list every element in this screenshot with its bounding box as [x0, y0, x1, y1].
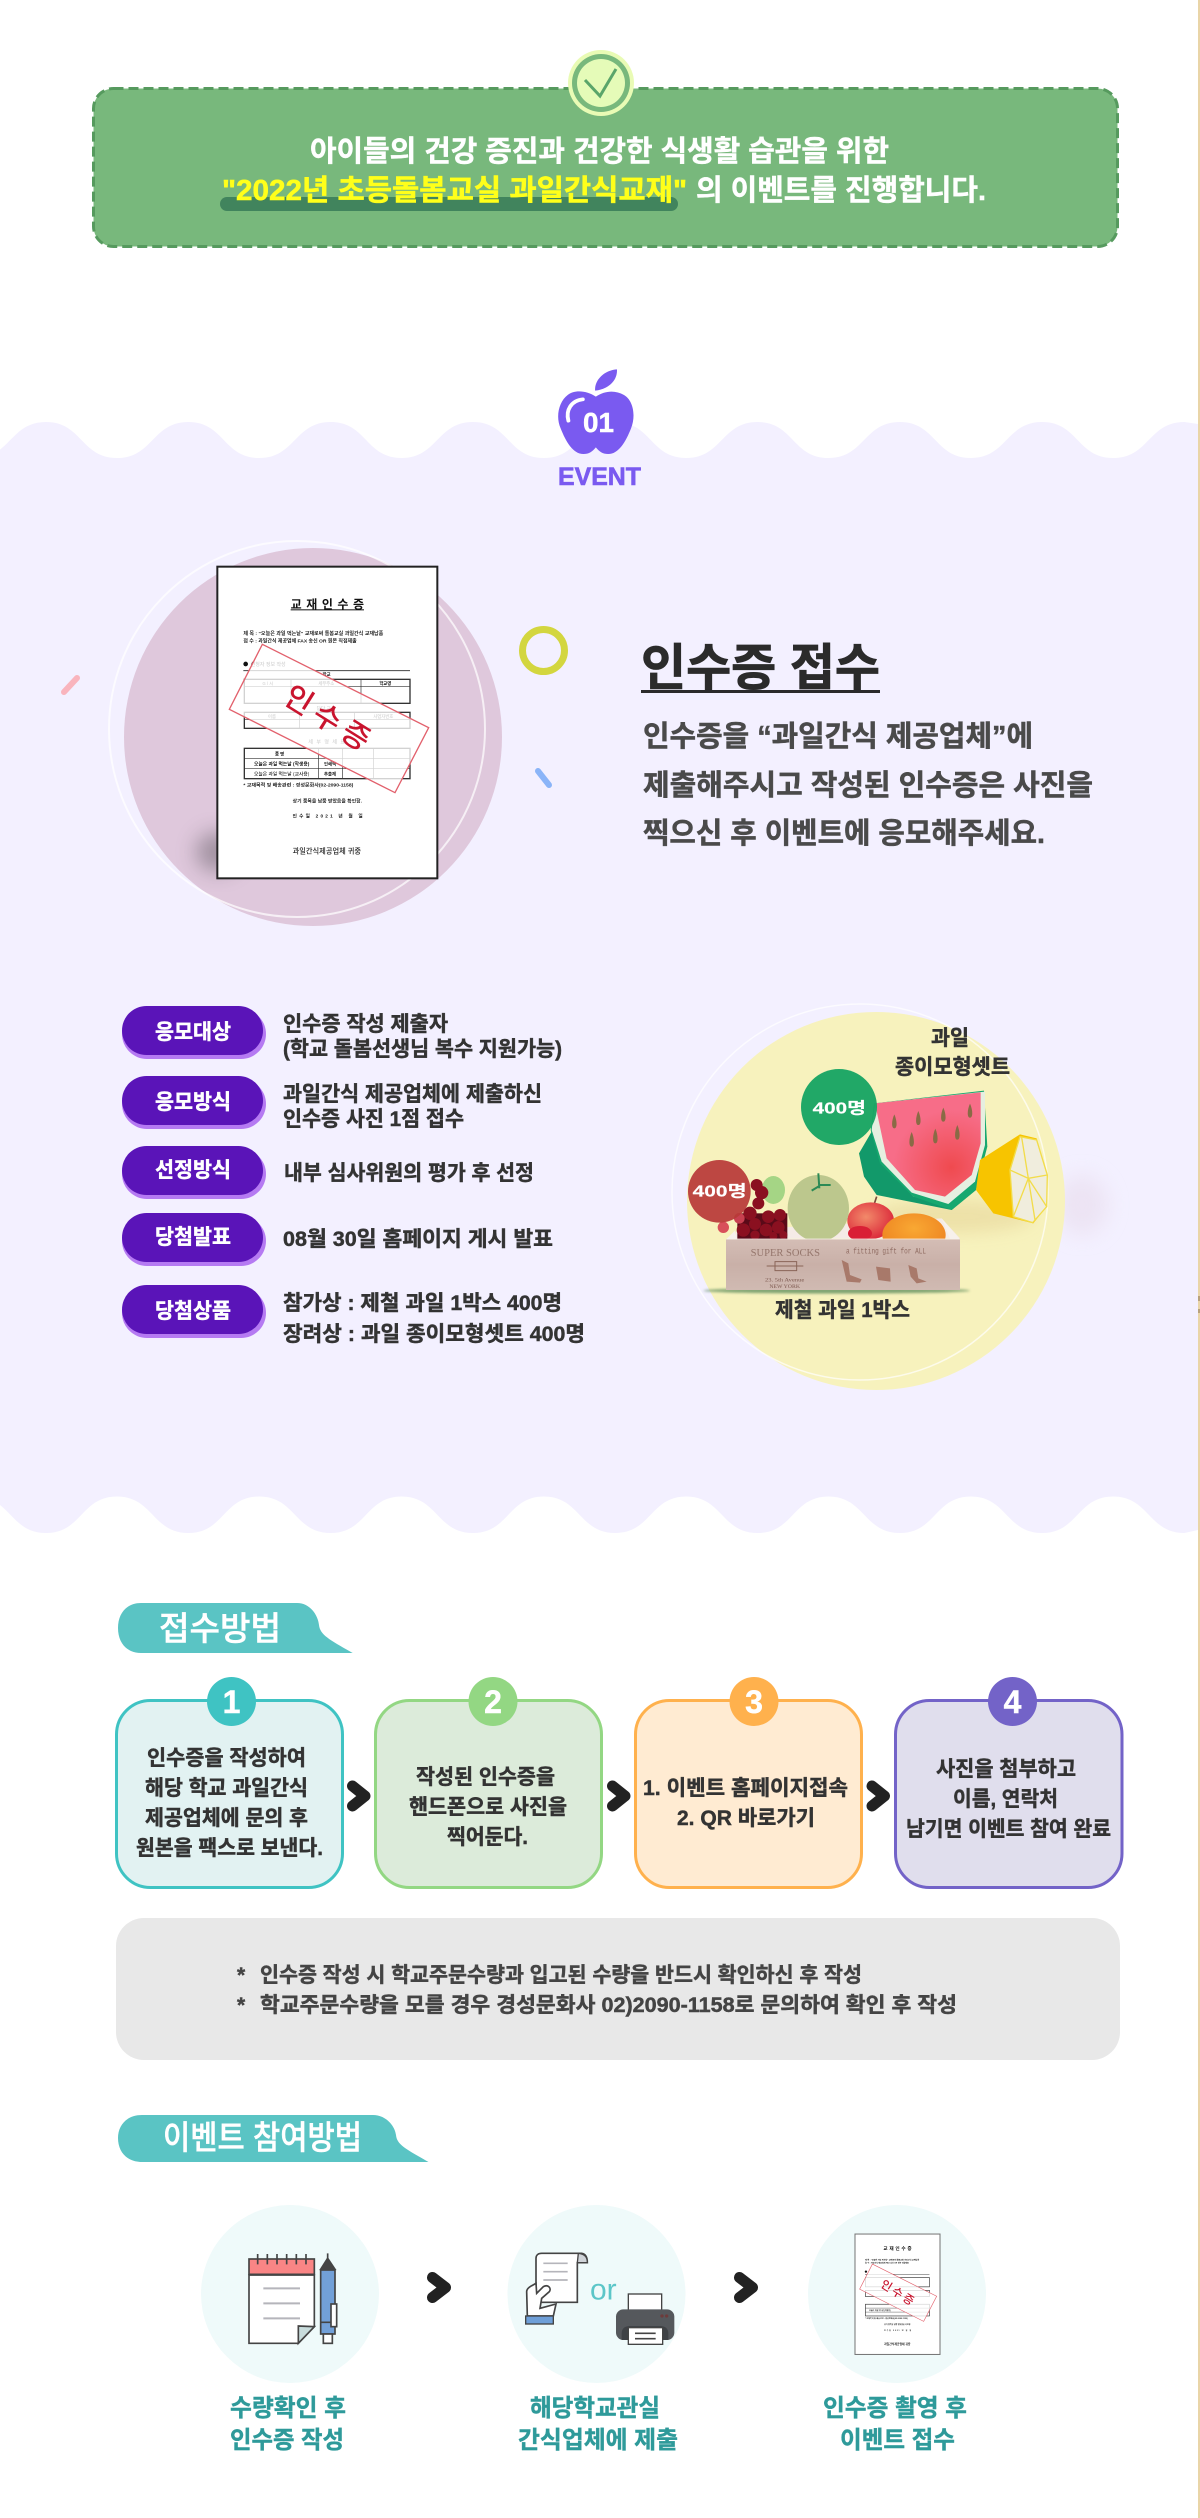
- caption: 간식업체에 제출: [518, 2427, 678, 2454]
- icon: small certificate: 상기 품목을 납품 받았음을 확인함.: [884, 2322, 911, 2326]
- row: prizes: 참가상 : 제철 과일 1박스 400명: [283, 1292, 562, 1315]
- row: prizes: 당첨상품: [155, 1300, 231, 1323]
- certificate document: 세 부 명 세 표: [308, 739, 345, 746]
- step: photo and enter: [808, 2205, 986, 2454]
- decorative pink dash: [64, 678, 77, 692]
- panel: notes: 인수증 작성 시 학교주문수량과 입고된 수량을 반드시 확인하신 후 작성: [260, 1964, 862, 1987]
- label: fruit box: 제철 과일 1박스: [775, 1299, 910, 1322]
- step card 1: 원본을 팩스로 보낸다.: [136, 1837, 323, 1860]
- label: paper fruit set: [895, 1027, 1010, 1079]
- certificate document: 신청자 정보 작성: [251, 661, 286, 668]
- step card 1: 해당 학교 과일간식: [145, 1777, 308, 1800]
- heading tab: how to participate: 이벤트 참여방법: [163, 2119, 362, 2156]
- text block: submission description: 제출해주시고 작성된 인수증은 사진을: [643, 769, 1093, 802]
- caption: 수량확인 후: [230, 2395, 346, 2422]
- row: applicants: 인수증 작성 제출자: [283, 1013, 448, 1036]
- icon: wooden crate: NEW YORK: [769, 1285, 801, 1290]
- icon: paper lemon: [976, 1134, 1047, 1223]
- highlight bar: [220, 197, 678, 211]
- banner text: 아이들의 건강 증진과 건강한 식생활 습관을 위한: [310, 135, 889, 168]
- icon: small certificate: 과일간식제공업체 귀중: [884, 2342, 911, 2346]
- decorative blue dash: [538, 771, 549, 785]
- icon: notepad and pen: [249, 2253, 337, 2343]
- heading tab: how to submit: [118, 1603, 353, 1653]
- banner text: 의 이벤트를 진행합니다.: [696, 174, 986, 207]
- row: prizes: 장려상 : 과일 종이모형셋트 400명: [283, 1323, 585, 1346]
- certificate document: 상기 품목을 납품 받았음을 확인함.: [293, 797, 362, 804]
- label: paper fruit set: 과일: [931, 1027, 969, 1050]
- row: applicants: [122, 1006, 562, 1061]
- row: method: 응모방식: [155, 1091, 231, 1114]
- icon: small certificate: 제 목 : "오늘은 과일 먹는날" 교재로써 돌봄교실 과일간식 교재납품: [865, 2257, 919, 2261]
- certificate document: 접 수 : 과일간식 제공업체 FAX 송신 OR 원본 직접제출: [243, 638, 357, 645]
- list: event details: [122, 1006, 585, 1346]
- icon: small certificate: * 교재목적 및 배송관련 : 경성문화사(02-2090-1158): [865, 2316, 908, 2320]
- icon: small certificate: 오늘은 과일 먹는날 (학생용): [869, 2308, 891, 2312]
- step card 1: 인수증을 작성하여: [147, 1747, 306, 1770]
- certificate document: 학교: [323, 671, 331, 678]
- caption: [230, 2395, 346, 2454]
- badge: 400 red: 400명: [693, 1183, 747, 1201]
- icon: apple stem and fruits: [718, 1173, 960, 1257]
- badge: number 1: 1: [223, 1684, 240, 1720]
- caption: 인수증 촬영 후: [823, 2395, 967, 2422]
- icon: apple 01 EVENT: 01: [583, 407, 614, 438]
- row: prizes: [122, 1285, 585, 1346]
- label: paper fruit set: 종이모형셋트: [895, 1056, 1010, 1079]
- step card 3: [636, 1677, 862, 1888]
- certificate document: 담당 교사: [317, 705, 336, 712]
- badge: 400 green: 400명: [813, 1099, 866, 1117]
- arrow 3: [872, 1786, 884, 1806]
- stamp: 인수증: [278, 680, 381, 761]
- step card 2: [376, 1677, 602, 1888]
- icon: small certificate: 인수일 2021 년 월 일: [884, 2328, 911, 2332]
- badge: number 4: [988, 1677, 1037, 1726]
- row: announcement: 당첨발표: [155, 1226, 231, 1249]
- badge: number 3: [730, 1677, 778, 1726]
- panel: prize illustration: [672, 1004, 1108, 1390]
- arrow 2: [612, 1786, 625, 1806]
- icon: paper or printer: [526, 2253, 674, 2344]
- panel: notes: [116, 1918, 1120, 2060]
- heading tab: how to submit: 접수방법: [159, 1610, 281, 1647]
- step card 1: 제공업체에 문의 후: [145, 1807, 308, 1830]
- icon: small certificate: 교 재 인 수 증: [883, 2245, 912, 2252]
- decorative ring: [522, 630, 564, 672]
- icon: wooden crate: 23. 5th Avenue: [765, 1279, 804, 1284]
- row: selection: 내부 심사위원의 평가 후 선정: [284, 1162, 534, 1185]
- certificate document: G / 시: [262, 681, 273, 686]
- icon: paper watermelon: [859, 1091, 987, 1210]
- badge: 400 green: [801, 1069, 877, 1145]
- certificate document: 오늘은 과일 먹는날 (교사용): [254, 770, 310, 777]
- step: write certificate: [201, 2205, 379, 2454]
- panel: notes: *: [237, 1964, 246, 1987]
- certificate document: 제 목 : "오늘은 과일 먹는날" 교재로써 돌봄교실 과일간식 교재납품: [243, 630, 384, 637]
- certificate document: 사업자번호: [373, 713, 393, 720]
- banner text: [222, 135, 986, 207]
- step card 4: 사진을 첨부하고: [936, 1758, 1076, 1781]
- badge: 400 red: [688, 1160, 751, 1223]
- row: selection: 선정방식: [155, 1159, 231, 1182]
- stamp: [229, 644, 429, 793]
- step card 2: 찍어둔다.: [447, 1826, 528, 1849]
- arrow: [740, 2278, 752, 2298]
- text block: submission description: [643, 720, 1093, 850]
- caption: [823, 2395, 967, 2454]
- certificate document: 과일간식제공업체 귀중: [293, 847, 361, 856]
- heading: certificate submission: 인수증 접수: [641, 640, 880, 696]
- certificate document: 학교명: [379, 680, 391, 687]
- caption: 이벤트 접수: [840, 2427, 955, 2454]
- icon: apple 01 EVENT: [558, 369, 641, 491]
- icon: check badge: [568, 50, 634, 116]
- step card 4: 남기면 이벤트 참여 완료: [906, 1818, 1111, 1841]
- row: selection: [122, 1146, 534, 1199]
- certificate document: 세부주소: [318, 680, 334, 687]
- certificate document: 교 재 인 수 증: [291, 596, 364, 611]
- badge: number 3: 3: [745, 1684, 763, 1720]
- certificate document: * 교재목적 및 배송관련 : 경성문화사(02-2090-1158): [243, 782, 354, 789]
- caption: 인수증 작성: [230, 2427, 344, 2454]
- caption: 해당학교관실: [530, 2395, 660, 2422]
- step card 2: 작성된 인수증을: [416, 1766, 555, 1789]
- panel: notes: *: [237, 1994, 246, 2017]
- icon: small certificate: 인수증: [878, 2278, 918, 2309]
- panel: lavender wave background: [0, 422, 1198, 1533]
- text block: submission description: 인수증을 “과일간식 제공업체”에: [643, 720, 1033, 753]
- certificate document: 인수일 2021 년 월 일: [293, 813, 363, 820]
- banner text: "2022년 초등돌봄교실 과일간식교재": [222, 174, 687, 207]
- caption: [518, 2395, 678, 2454]
- row: applicants: 응모대상: [155, 1021, 231, 1044]
- arrow: [432, 2278, 446, 2298]
- row: method: 과일간식 제공업체에 제출하신: [283, 1083, 542, 1106]
- arrow 1: [352, 1786, 365, 1806]
- step card 3: 2. QR 바로가기: [677, 1807, 815, 1830]
- certificate document: [217, 567, 437, 878]
- badge: number 2: [468, 1677, 518, 1726]
- badge: number 4: 4: [1004, 1684, 1022, 1720]
- icon: small certificate: [855, 2234, 940, 2354]
- step: submit to vendor: [508, 2205, 686, 2454]
- certificate document: 이름: [268, 713, 276, 720]
- right edge stripe: [1198, 0, 1200, 2518]
- step card 1: [116, 1677, 342, 1888]
- icon: paper or printer: or: [590, 2273, 617, 2306]
- icon: wooden crate: SUPER SOCKS: [751, 1248, 820, 1259]
- step card 4: 이름, 연락처: [953, 1788, 1058, 1811]
- step card 3: 1. 이벤트 홈페이지접속: [643, 1777, 848, 1800]
- panel: intro banner: [94, 50, 1118, 246]
- row: applicants: (학교 돌봄선생님 복수 지원가능): [283, 1038, 562, 1061]
- step card 2: 핸드폰으로 사진을: [409, 1796, 567, 1819]
- row: announcement: 08월 30일 홈페이지 게시 발표: [283, 1228, 553, 1251]
- icon: apple 01 EVENT: EVENT: [558, 463, 641, 491]
- certificate document: 품 명: [275, 750, 284, 756]
- certificate document: 추출제: [324, 770, 336, 777]
- row: method: [122, 1076, 542, 1131]
- certificate document: 인쇄책: [324, 760, 336, 767]
- badge: number 1: [207, 1677, 256, 1726]
- icon: wooden crate: [703, 1218, 970, 1294]
- row: method: 인수증 사진 1점 접수: [283, 1108, 464, 1131]
- icon: small certificate: 접 수 : 과일간식 제공업체 FAX 송신 OR 원본 직접제출: [865, 2260, 909, 2264]
- panel: notes: 학교주문수량을 모를 경우 경성문화사 02)2090-1158로 문의하여 확인 후 작성: [260, 1994, 957, 2017]
- panel: certificate illustration: [109, 541, 502, 926]
- certificate document: 오늘은 과일 먹는날 (학생용): [254, 760, 310, 767]
- heading tab: how to participate: [118, 2115, 428, 2162]
- row: announcement: [122, 1213, 553, 1266]
- step card 4: [896, 1677, 1122, 1888]
- badge: number 2: 2: [484, 1684, 502, 1720]
- icon: wooden crate: a fitting gift for ALL: [846, 1247, 926, 1256]
- text block: submission description: 찍으신 후 이벤트에 응모해주세요.: [643, 817, 1045, 850]
